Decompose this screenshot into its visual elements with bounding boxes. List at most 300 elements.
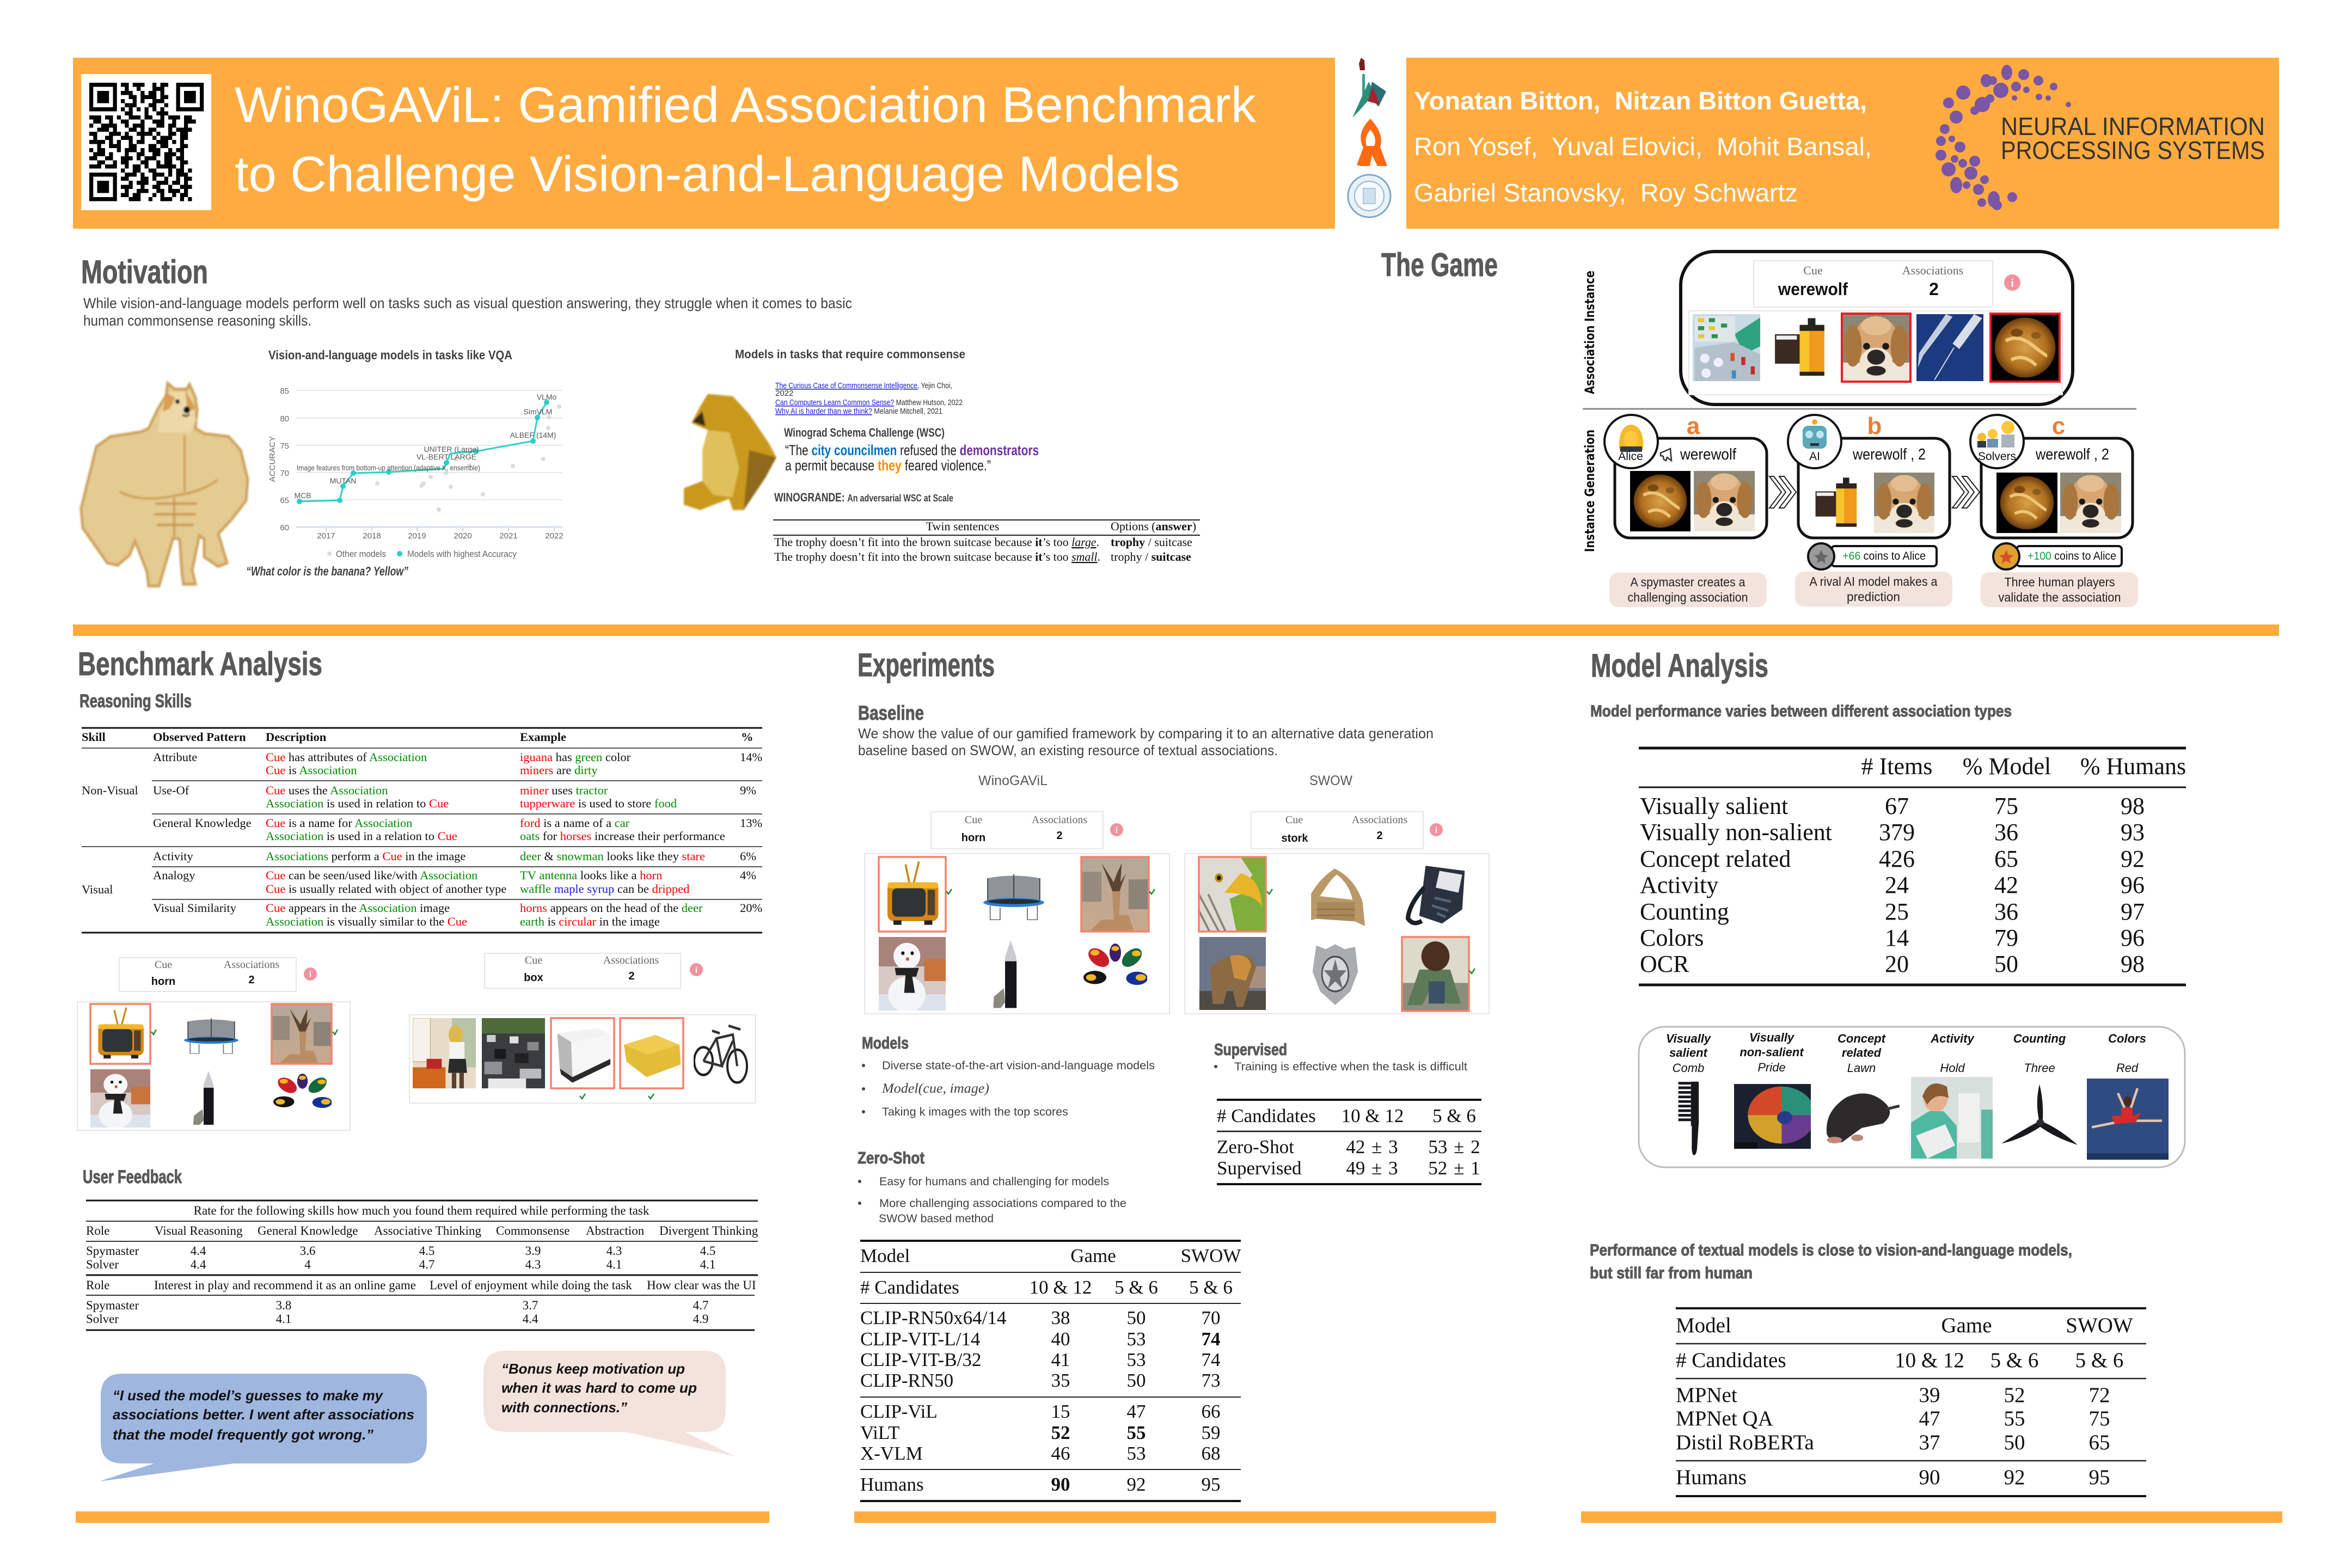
table: association types: 50 <box>1994 951 2018 977</box>
heading: model analysis: Model Analysis <box>1591 647 1768 684</box>
table: supervised results: 49 ± 3 <box>1346 1157 1398 1179</box>
table: twin sentences: The trophy doesn’t fit into the brown suitcase because it’s too small. <box>774 550 1100 564</box>
example: horn: Associations <box>224 959 279 971</box>
table: user feedback: 4.1 <box>607 1258 622 1271</box>
table: user feedback: 4.4 <box>523 1312 538 1326</box>
table: reasoning skills: Analogy <box>153 868 195 882</box>
table: textual models: MPNet QA <box>1676 1407 1773 1430</box>
table: user feedback: General Knowledge <box>258 1224 358 1238</box>
table: user feedback: 4.3 <box>525 1258 541 1271</box>
bottom bar: benchmark <box>76 1511 769 1523</box>
subheading: association types: Model performance varies between different association types <box>1590 702 2012 720</box>
association type examples: Lawn <box>1847 1061 1876 1075</box>
example: stork swow: Associations <box>1352 814 1407 826</box>
table: textual models: 50 <box>2004 1431 2025 1454</box>
table: model accuracy: 10 & 12 <box>1030 1277 1092 1298</box>
table: user feedback: 4.9 <box>693 1312 708 1326</box>
table: association types <box>1639 748 2186 985</box>
example: horn: i <box>309 970 311 979</box>
table: textual models: 65 <box>2088 1431 2110 1454</box>
heading: motivation: Motivation <box>81 254 208 290</box>
association type examples: salient <box>1669 1046 1708 1059</box>
table: reasoning skills: 14% <box>740 750 762 764</box>
reference links: Why AI is harder than we think? Melanie Mitchell, 2021 <box>775 407 942 416</box>
coins reward: +66: +66 coins to Alice <box>1842 550 1926 562</box>
table: model accuracy: 5 & 6 <box>1189 1277 1233 1298</box>
example: stork swow <box>1185 812 1489 1014</box>
callout: pink quote <box>483 1351 735 1456</box>
table: twin sentences: Options (answer) <box>1111 519 1196 533</box>
chart: accuracy over time: 2020 <box>454 531 472 541</box>
table: supervised results: 52 ± 1 <box>1428 1157 1480 1179</box>
table: user feedback: 4.7 <box>419 1258 434 1271</box>
table: user feedback: How clear was the UI <box>647 1278 756 1292</box>
table: model accuracy: 5 & 6 <box>1114 1277 1158 1298</box>
association type examples: Pride <box>1757 1061 1786 1074</box>
example: stork swow: 2 <box>1376 830 1383 842</box>
association type examples: Red <box>2116 1061 2139 1075</box>
table: model accuracy: 53 <box>1127 1443 1146 1464</box>
title text: WinoGAViL: Gamified Association Benchmark <box>235 77 1257 133</box>
table: reasoning skills: Visual <box>82 883 113 896</box>
example: box <box>409 953 756 1103</box>
table: model accuracy: Model <box>860 1245 910 1266</box>
table: model accuracy: 46 <box>1051 1443 1070 1464</box>
table: reasoning skills: Cue uses the Association <box>266 783 388 797</box>
supervised section: Supervised <box>1214 1040 1287 1059</box>
association instance card: 2 <box>1929 279 1939 299</box>
winogrande heading: WINOGRANDE: An adversarial WSC at Scale <box>774 491 953 504</box>
table: model accuracy: CLIP-RN50x64/14 <box>860 1307 1006 1328</box>
example: horn game: 2 <box>1056 830 1063 842</box>
header banner: authors and NeurIPS <box>1406 58 2279 229</box>
NeurIPS logo <box>1935 65 2265 210</box>
table: reasoning skills: 20% <box>740 901 762 915</box>
table: twin sentences <box>773 519 1200 564</box>
caption a <box>1609 573 1767 607</box>
association type examples <box>1639 1027 2185 1167</box>
table: association types: 36 <box>1994 819 2018 846</box>
table: textual models: 5 & 6 <box>2075 1349 2123 1372</box>
reference links: 2022 <box>775 389 793 398</box>
orange divider bar <box>73 624 2279 636</box>
table: reasoning skills: waffle maple syrup can be dripped <box>520 882 689 896</box>
authors: Yonatan Bitton, Nitzan Bitton Guetta, <box>1414 87 1867 115</box>
chart: accuracy over time: Models with highest Accuracy <box>407 549 517 559</box>
chart: accuracy over time: Image features from bottom-up attention (adaptive K, ensemble) <box>297 463 480 472</box>
association type examples: Counting <box>2013 1032 2066 1045</box>
icon: robot emoji <box>1803 419 1827 449</box>
table: association types: Visually salient <box>1640 793 1788 819</box>
icon: solvers emoji <box>1977 421 2014 448</box>
table: twin sentences: trophy / suitcase <box>1111 535 1192 549</box>
table: reasoning skills: Attribute <box>153 750 197 764</box>
authors <box>1414 87 1872 207</box>
models section <box>862 1033 1155 1118</box>
table: reasoning skills: iguana has green color <box>520 750 631 764</box>
association instance card: i <box>2011 278 2014 290</box>
table: user feedback: 4.1 <box>700 1258 715 1271</box>
table: user feedback <box>86 1200 758 1330</box>
callout: pink quote: when it was hard to come up <box>501 1380 697 1396</box>
table: textual models: Model <box>1676 1314 1731 1337</box>
table: reasoning skills: Cue can be seen/used like/with Association <box>266 868 477 882</box>
example: box: box <box>524 972 543 984</box>
step c: solvers: c <box>2052 413 2065 439</box>
table: user feedback: Interest in play and recommend it as an online game <box>154 1278 416 1292</box>
table: user feedback: Associative Thinking <box>374 1224 481 1238</box>
subheading: textual models: Performance of textual models is close to vision-and-language models, <box>1590 1241 2072 1259</box>
table: model accuracy: 55 <box>1127 1422 1146 1443</box>
table: association types: 75 <box>1994 793 2018 819</box>
chart: accuracy over time: 2018 <box>363 531 381 541</box>
table: model accuracy: # Candidates <box>860 1277 959 1298</box>
table: reasoning skills: 6% <box>740 849 756 863</box>
table: reasoning skills: tupperware is used to store food <box>520 797 677 810</box>
chart: accuracy over time: SimVLM <box>524 407 552 416</box>
header banner: title <box>73 58 1335 229</box>
table: supervised results: Supervised <box>1217 1157 1302 1179</box>
table: reasoning skills: Example <box>520 730 566 744</box>
table: supervised results: 10 & 12 <box>1342 1105 1404 1126</box>
baseline body text <box>858 725 1434 758</box>
table: association types: 98 <box>2121 793 2145 819</box>
example: box: Associations <box>603 954 659 966</box>
caption b: A rival AI model makes a <box>1810 574 1938 589</box>
table: model accuracy: 53 <box>1127 1328 1146 1350</box>
step b: AI <box>1788 413 1950 538</box>
table: reasoning skills: miners are dirty <box>520 763 598 777</box>
table: user feedback: Commonsense <box>496 1224 569 1238</box>
table: association types: Visually non-salient <box>1640 819 1832 846</box>
table: reasoning skills: General Knowledge <box>153 816 252 830</box>
table: association types: 67 <box>1885 793 1909 819</box>
callout: blue quote: that the model frequently got wrong.” <box>113 1426 373 1443</box>
table: textual models: Distil RoBERTa <box>1676 1431 1814 1454</box>
table: model accuracy: CLIP-ViL <box>860 1401 938 1422</box>
association type examples: Colors <box>2108 1032 2146 1045</box>
table: reasoning skills: % <box>741 730 754 744</box>
table: textual models: 75 <box>2088 1407 2110 1430</box>
example: horn <box>77 958 350 1130</box>
chart: accuracy over time <box>268 387 564 559</box>
table: association types: 96 <box>2121 872 2145 898</box>
table: model accuracy: 41 <box>1051 1349 1070 1370</box>
table: textual models <box>1676 1308 2146 1496</box>
label: association instance: Association Instance <box>1582 271 1597 394</box>
table: model accuracy: 50 <box>1127 1307 1146 1328</box>
table: reasoning skills: Associations perform a Cue in the image <box>266 849 465 863</box>
table: reasoning skills: TV antenna looks like a horn <box>520 868 662 882</box>
panel: the game <box>1381 247 2138 607</box>
authors: Gabriel Stanovsky, Roy Schwartz <box>1414 179 1798 207</box>
association type examples: Three <box>2024 1061 2055 1075</box>
table: association types: 96 <box>2121 924 2145 951</box>
subheading: baseline: Baseline <box>858 702 924 724</box>
table: model accuracy: SWOW <box>1181 1245 1241 1266</box>
table: association types: 92 <box>2121 846 2145 872</box>
coins reward: +100: +100 coins to Alice <box>2028 550 2116 562</box>
table: reasoning skills: Non-Visual <box>82 783 138 797</box>
table: association types: 25 <box>1885 898 1909 925</box>
table: model accuracy: 38 <box>1051 1307 1070 1328</box>
table: supervised results: 5 & 6 <box>1432 1105 1476 1126</box>
chart: accuracy over time: 2019 <box>408 531 426 541</box>
caption a: A spymaster creates a <box>1630 575 1745 589</box>
institution logos <box>1348 58 1391 217</box>
table: model accuracy: 66 <box>1201 1401 1221 1422</box>
table: twin sentences: Twin sentences <box>926 519 999 533</box>
table: model accuracy: CLIP-RN50 <box>860 1370 953 1391</box>
chart: accuracy over time: Other models <box>336 549 386 559</box>
table: reasoning skills <box>82 728 762 933</box>
caption a: challenging association <box>1628 590 1748 604</box>
table: textual models: Humans <box>1676 1466 1747 1489</box>
table: reasoning skills: Association is used in a relation to Cue <box>266 829 457 843</box>
quote: banana: “What color is the banana? Yellow” <box>246 564 408 578</box>
association type examples: Visually <box>1666 1032 1712 1045</box>
table: twin sentences: trophy / suitcase <box>1111 550 1191 564</box>
table: reasoning skills: Cue appears in the Association image <box>266 901 450 915</box>
table: association types: # Items <box>1861 753 1932 780</box>
chart: accuracy over time: 75 <box>280 442 289 451</box>
panel: motivation <box>81 254 1200 586</box>
example: horn game <box>865 812 1169 1014</box>
table: association types: 426 <box>1879 846 1915 872</box>
table: model accuracy: Humans <box>860 1474 924 1495</box>
table: user feedback: 4.5 <box>419 1244 434 1258</box>
heading: the game: The Game <box>1381 247 1498 283</box>
table: supervised results: 53 ± 2 <box>1428 1136 1480 1157</box>
table: association types: % Model <box>1963 753 2051 780</box>
chart: accuracy over time: VLMo <box>537 393 556 401</box>
table: textual models: Game <box>1941 1314 1992 1337</box>
table: user feedback: 4.7 <box>693 1298 708 1312</box>
caption b <box>1795 572 1952 607</box>
baseline body text: We show the value of our gamified framework by comparing it to an alternative data generation <box>858 725 1434 742</box>
table: supervised results: 42 ± 3 <box>1346 1136 1398 1157</box>
table: model accuracy: 92 <box>1127 1474 1146 1495</box>
table: user feedback: Divergent Thinking <box>659 1224 758 1238</box>
callout: pink quote: with connections.” <box>501 1399 627 1416</box>
subheading: user feedback: User Feedback <box>83 1167 182 1187</box>
step b: AI: werewolf , 2 <box>1852 446 1926 463</box>
table: supervised results: # Candidates <box>1217 1105 1316 1126</box>
motivation body text: human commonsense reasoning skills. <box>83 313 311 329</box>
example: horn: 2 <box>248 974 255 986</box>
table: model accuracy: ViLT <box>860 1422 899 1443</box>
table: association types: 379 <box>1879 819 1915 846</box>
table: textual models: MPNet <box>1676 1383 1737 1407</box>
table: reasoning skills: deer & snowman looks like they stare <box>520 849 705 863</box>
step b: AI: AI <box>1809 450 1820 463</box>
models section: Models <box>862 1033 909 1052</box>
example: stork swow: Cue <box>1285 814 1303 826</box>
table: user feedback: Level of enjoyment while doing the task <box>430 1278 632 1292</box>
table: user feedback: Role <box>86 1278 109 1292</box>
table: model accuracy: 35 <box>1051 1370 1070 1391</box>
bottom bar: experiments <box>854 1511 1496 1523</box>
table: model accuracy: 74 <box>1201 1349 1221 1370</box>
table: reasoning skills: Cue is a name for Association <box>266 816 412 830</box>
table: association types: Activity <box>1640 872 1718 898</box>
table: supervised results <box>1217 1100 1481 1184</box>
table: association types: Colors <box>1640 924 1704 951</box>
table: association types: 24 <box>1885 872 1909 898</box>
example: horn game: Cue <box>965 814 982 826</box>
table: user feedback: 4.3 <box>607 1244 622 1258</box>
motivation body text <box>83 295 852 329</box>
panel: experiments <box>854 647 1496 1523</box>
table: association types: OCR <box>1640 951 1689 977</box>
table: model accuracy: Game <box>1070 1245 1116 1266</box>
caption c: validate the association <box>1998 590 2121 604</box>
table: user feedback: 4.5 <box>700 1244 715 1258</box>
table: textual models: 10 & 12 <box>1895 1349 1964 1372</box>
table: association types: % Humans <box>2080 753 2186 780</box>
zero-shot section: Easy for humans and challenging for models <box>879 1175 1109 1188</box>
table: association types: 36 <box>1994 898 2018 925</box>
step c: solvers: werewolf , 2 <box>2035 446 2109 463</box>
icon: alice emoji <box>1619 425 1643 452</box>
table: reasoning skills: Use-Of <box>153 783 189 797</box>
table: reasoning skills: earth is circular in the image <box>520 915 660 928</box>
table: model accuracy: 40 <box>1051 1328 1070 1350</box>
table: model accuracy: CLIP-VIT-L/14 <box>860 1328 980 1350</box>
NeurIPS logo: PROCESSING SYSTEMS <box>2001 136 2265 164</box>
example: horn: horn <box>151 976 175 988</box>
example: box: i <box>695 966 697 975</box>
callout: blue quote <box>99 1374 427 1481</box>
table: reasoning skills: oats for horses increase their performance <box>520 829 725 843</box>
step b: AI: b <box>1867 413 1882 439</box>
zero-shot section: SWOW based method <box>879 1212 994 1225</box>
chart: accuracy over time: 70 <box>280 469 289 478</box>
association instance card <box>1681 252 2073 405</box>
association type examples: Hold <box>1940 1061 1965 1075</box>
table: reasoning skills: 9% <box>740 783 756 797</box>
table: supervised results: Zero-Shot <box>1217 1136 1294 1157</box>
association type examples: non-salient <box>1739 1045 1804 1059</box>
chart: accuracy over time: 80 <box>280 414 289 424</box>
table: user feedback: Rate for the following skills how much you found them required while performing the task <box>194 1204 650 1217</box>
table: reasoning skills: Visual Similarity <box>153 901 237 915</box>
table: model accuracy: 70 <box>1201 1307 1221 1328</box>
table: textual models: 92 <box>2004 1466 2025 1489</box>
association type examples: Activity <box>1930 1032 1975 1045</box>
table: user feedback: 4.4 <box>191 1258 206 1271</box>
heading: experiments: Experiments <box>857 647 995 683</box>
subheading: textual models: but still far from human <box>1590 1264 1753 1282</box>
label: instance generation: Instance Generation <box>1582 430 1597 552</box>
bottom bar: model analysis <box>1581 1511 2282 1523</box>
caption c <box>1981 572 2138 607</box>
winograd schema heading: Winograd Schema Challenge (WSC) <box>784 426 945 439</box>
table: reasoning skills: Activity <box>153 849 193 863</box>
icon: megaphone <box>1661 449 1671 461</box>
caption c: Three human players <box>2005 575 2115 589</box>
step c: solvers: Solvers <box>1978 450 2016 463</box>
table: model accuracy: CLIP-VIT-B/32 <box>860 1349 981 1370</box>
coins reward: +100 <box>1993 543 2122 569</box>
baseline body text: baseline based on SWOW, an existing resource of textual associations. <box>858 742 1278 758</box>
zero-shot section: Zero-Shot <box>857 1148 924 1167</box>
icon: muscular doge <box>81 383 248 586</box>
table: association types: 98 <box>2121 951 2145 977</box>
table: textual models: 90 <box>1919 1466 1940 1489</box>
table: textual models: 55 <box>2004 1407 2025 1430</box>
winograd sentence: “The city councilmen refused the demonstrators <box>785 442 1039 458</box>
table: reasoning skills: Skill <box>82 730 106 744</box>
table: user feedback: 4.1 <box>276 1312 291 1326</box>
table: model accuracy: 74 <box>1201 1328 1221 1350</box>
subheading: vision-and-language models: Vision-and-language models in tasks like VQA <box>268 348 512 362</box>
title text: to Challenge Vision-and-Language Models <box>235 146 1180 202</box>
table: textual models: 72 <box>2088 1383 2110 1407</box>
table: user feedback: Spymaster <box>86 1244 139 1258</box>
arrow: b to c <box>1952 476 1980 508</box>
heading: benchmark analysis: Benchmark Analysis <box>78 646 322 682</box>
association type examples: Concept <box>1837 1032 1886 1045</box>
association type examples: Visually <box>1749 1031 1795 1044</box>
chart: accuracy over time: ALBEF (14M) <box>510 431 556 439</box>
table: model accuracy: 47 <box>1127 1401 1146 1422</box>
table: textual models: 5 & 6 <box>1990 1349 2038 1372</box>
table: user feedback: 3.9 <box>525 1244 541 1258</box>
zero-shot section: More challenging associations compared to the <box>879 1197 1126 1210</box>
association instance card: werewolf <box>1778 279 1848 299</box>
table: user feedback: Solver <box>86 1258 119 1271</box>
table: association types: Concept related <box>1640 846 1791 872</box>
chart: accuracy over time: 60 <box>280 523 289 532</box>
association type examples: related <box>1842 1046 1882 1059</box>
icon: cheems dog <box>684 394 776 510</box>
example: box: 2 <box>628 970 635 982</box>
chart: accuracy over time: UNITER (Large) <box>424 445 479 454</box>
callout: pink quote: “Bonus keep motivation up <box>501 1361 685 1377</box>
step a: spymaster: Alice <box>1618 450 1643 463</box>
table: textual models: 39 <box>1919 1383 1940 1407</box>
table: model accuracy: 15 <box>1051 1401 1070 1422</box>
table: user feedback: 3.6 <box>300 1244 315 1258</box>
association instance card: Associations <box>1902 264 1963 277</box>
panel: benchmark analysis <box>76 646 769 1523</box>
table: model accuracy: 90 <box>1051 1474 1070 1495</box>
table: user feedback: 3.8 <box>276 1298 291 1312</box>
example: stork swow: stork <box>1282 832 1308 844</box>
models section: Diverse state-of-the-art vision-and-language models <box>882 1059 1155 1072</box>
step a: spymaster: werewolf <box>1680 446 1737 463</box>
table: model accuracy: 53 <box>1127 1349 1146 1370</box>
caption b: prediction <box>1847 590 1900 604</box>
NeurIPS logo: NEURAL INFORMATION <box>2001 112 2265 140</box>
table: model accuracy: 73 <box>1201 1370 1221 1391</box>
table: association types: 65 <box>1994 846 2018 872</box>
table: user feedback: 4.4 <box>191 1244 206 1258</box>
table: user feedback: Solver <box>86 1312 119 1326</box>
table: textual models: # Candidates <box>1676 1349 1786 1372</box>
chart: accuracy over time: MCB <box>294 491 311 500</box>
table: model accuracy: 52 <box>1051 1422 1070 1443</box>
reference links: Can Computers Learn Common Sense? Matthew Hutson, 2022 <box>775 398 963 407</box>
zero-shot section <box>857 1148 1126 1225</box>
subheading: commonsense models: Models in tasks that require commonsense <box>735 347 965 361</box>
step a: spymaster <box>1604 413 1767 538</box>
chart: accuracy over time: MUTAN <box>330 476 356 485</box>
table: association types: 93 <box>2121 819 2145 846</box>
callout: blue quote: “I used the model’s guesses to make my <box>113 1387 384 1404</box>
table: textual models: 47 <box>1919 1407 1940 1430</box>
